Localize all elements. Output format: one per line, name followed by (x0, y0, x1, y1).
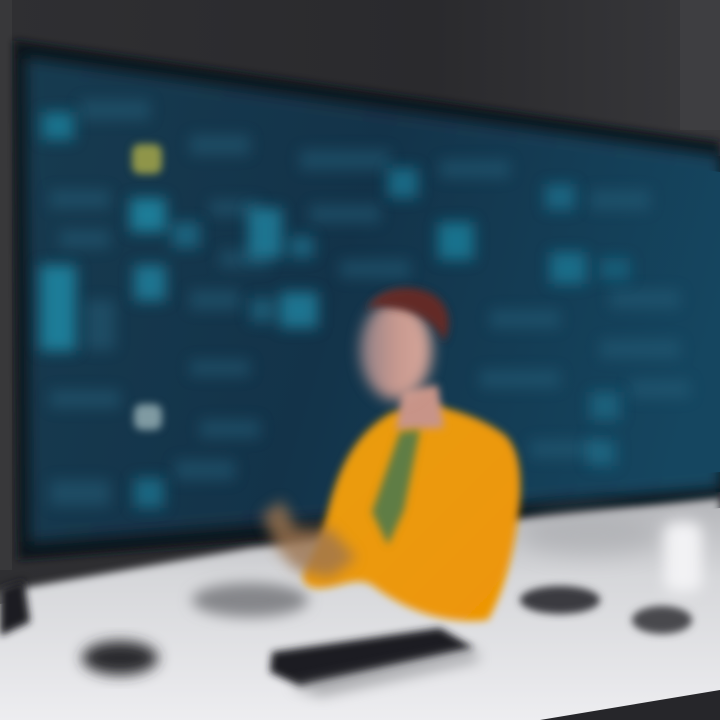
bright data blocks (40, 112, 630, 508)
keyboard (270, 628, 474, 686)
screen bezel (14, 40, 720, 560)
person (262, 288, 520, 621)
panel: data screen (14, 40, 720, 560)
phone right (520, 586, 600, 614)
screen surface (26, 58, 720, 542)
pale status block (134, 404, 162, 430)
face (360, 300, 432, 400)
desk (0, 498, 720, 720)
left hand (262, 500, 356, 578)
data rows (50, 100, 690, 506)
jacket (303, 406, 520, 621)
yellow status block (132, 144, 162, 174)
small device right (632, 606, 692, 634)
keyboard shadow (290, 650, 480, 696)
mouse left (82, 641, 158, 675)
white cup (664, 522, 702, 592)
shirt and tie (372, 430, 420, 545)
desk objects (82, 522, 702, 696)
neck (396, 385, 444, 430)
hair (366, 288, 449, 342)
tablet (192, 583, 308, 617)
